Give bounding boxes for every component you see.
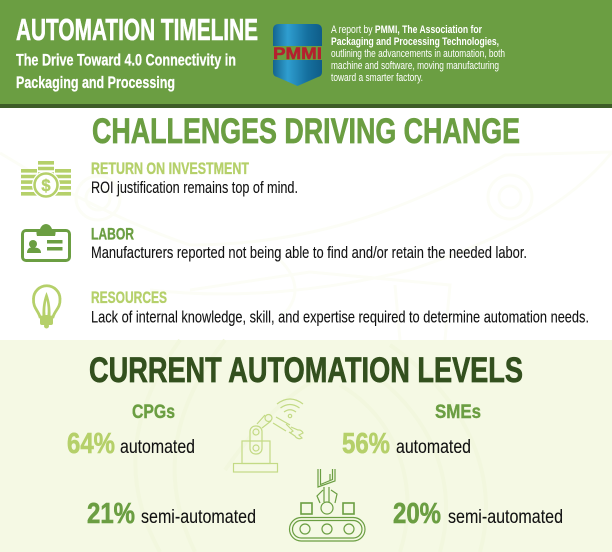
label: SMEs: SMEs — [435, 402, 481, 423]
stat: 64% automated: automated — [120, 437, 195, 458]
stat: 56% automated: 56% — [342, 428, 390, 460]
report description: machine and software, moving manufacturing — [331, 60, 499, 72]
title: AUTOMATION TIMELINE — [16, 12, 258, 47]
logo: PMMI shield — [273, 24, 322, 86]
stat: 21% semi-automated: semi-automated — [141, 507, 256, 528]
text: resources heading: RESOURCES — [91, 289, 167, 307]
panel: header banner — [0, 0, 612, 108]
stat: 21% semi-automated — [87, 498, 256, 530]
stat: 21% semi-automated: 21% — [87, 498, 135, 530]
stat: 64% automated — [67, 428, 195, 460]
column: CPGs — [67, 402, 256, 530]
text: ROI heading: RETURN ON INVESTMENT — [91, 160, 249, 178]
stat: 20% semi-automated — [393, 498, 563, 530]
report description: outlining the advancements in automation, both — [331, 48, 505, 60]
report description: Packaging and Processing Technologies, — [331, 36, 499, 48]
icon: robot arm with wifi — [234, 399, 303, 472]
logo: PMMI shield: PMMI — [273, 44, 322, 63]
stat: 56% automated: automated — [396, 437, 471, 458]
icon: coins — [21, 161, 71, 199]
text: ROI description: ROI justification remains top of mind. — [91, 178, 298, 197]
panel: challenges background — [0, 108, 612, 340]
label: CPGs: CPGs — [132, 402, 175, 423]
subtitle: The Drive Toward 4.0 Connectivity in — [16, 50, 236, 70]
column: SMEs — [342, 402, 563, 530]
subtitle — [16, 50, 236, 92]
icon: conveyor with gripper — [290, 469, 365, 541]
challenge: return on investment — [21, 160, 298, 199]
challenge: labor — [22, 224, 527, 262]
challenge: resources — [33, 286, 589, 328]
stat: 20% semi-automated: semi-automated — [448, 507, 563, 528]
icon: ID badge — [22, 224, 70, 260]
report description — [331, 24, 505, 84]
text: labor heading: LABOR — [91, 226, 134, 244]
report description: A report by PMMI, The Association for — [331, 24, 483, 36]
stat: 64% automated: 64% — [67, 428, 115, 460]
icon: light bulb — [33, 286, 60, 328]
panel: automation levels background — [0, 340, 612, 552]
subtitle: Packaging and Processing — [16, 73, 175, 92]
report description: toward a smarter factory. — [331, 72, 423, 84]
stat: 56% automated — [342, 428, 471, 460]
stat: 20% semi-automated: 20% — [393, 498, 441, 530]
icon: coins: $ — [41, 177, 51, 195]
